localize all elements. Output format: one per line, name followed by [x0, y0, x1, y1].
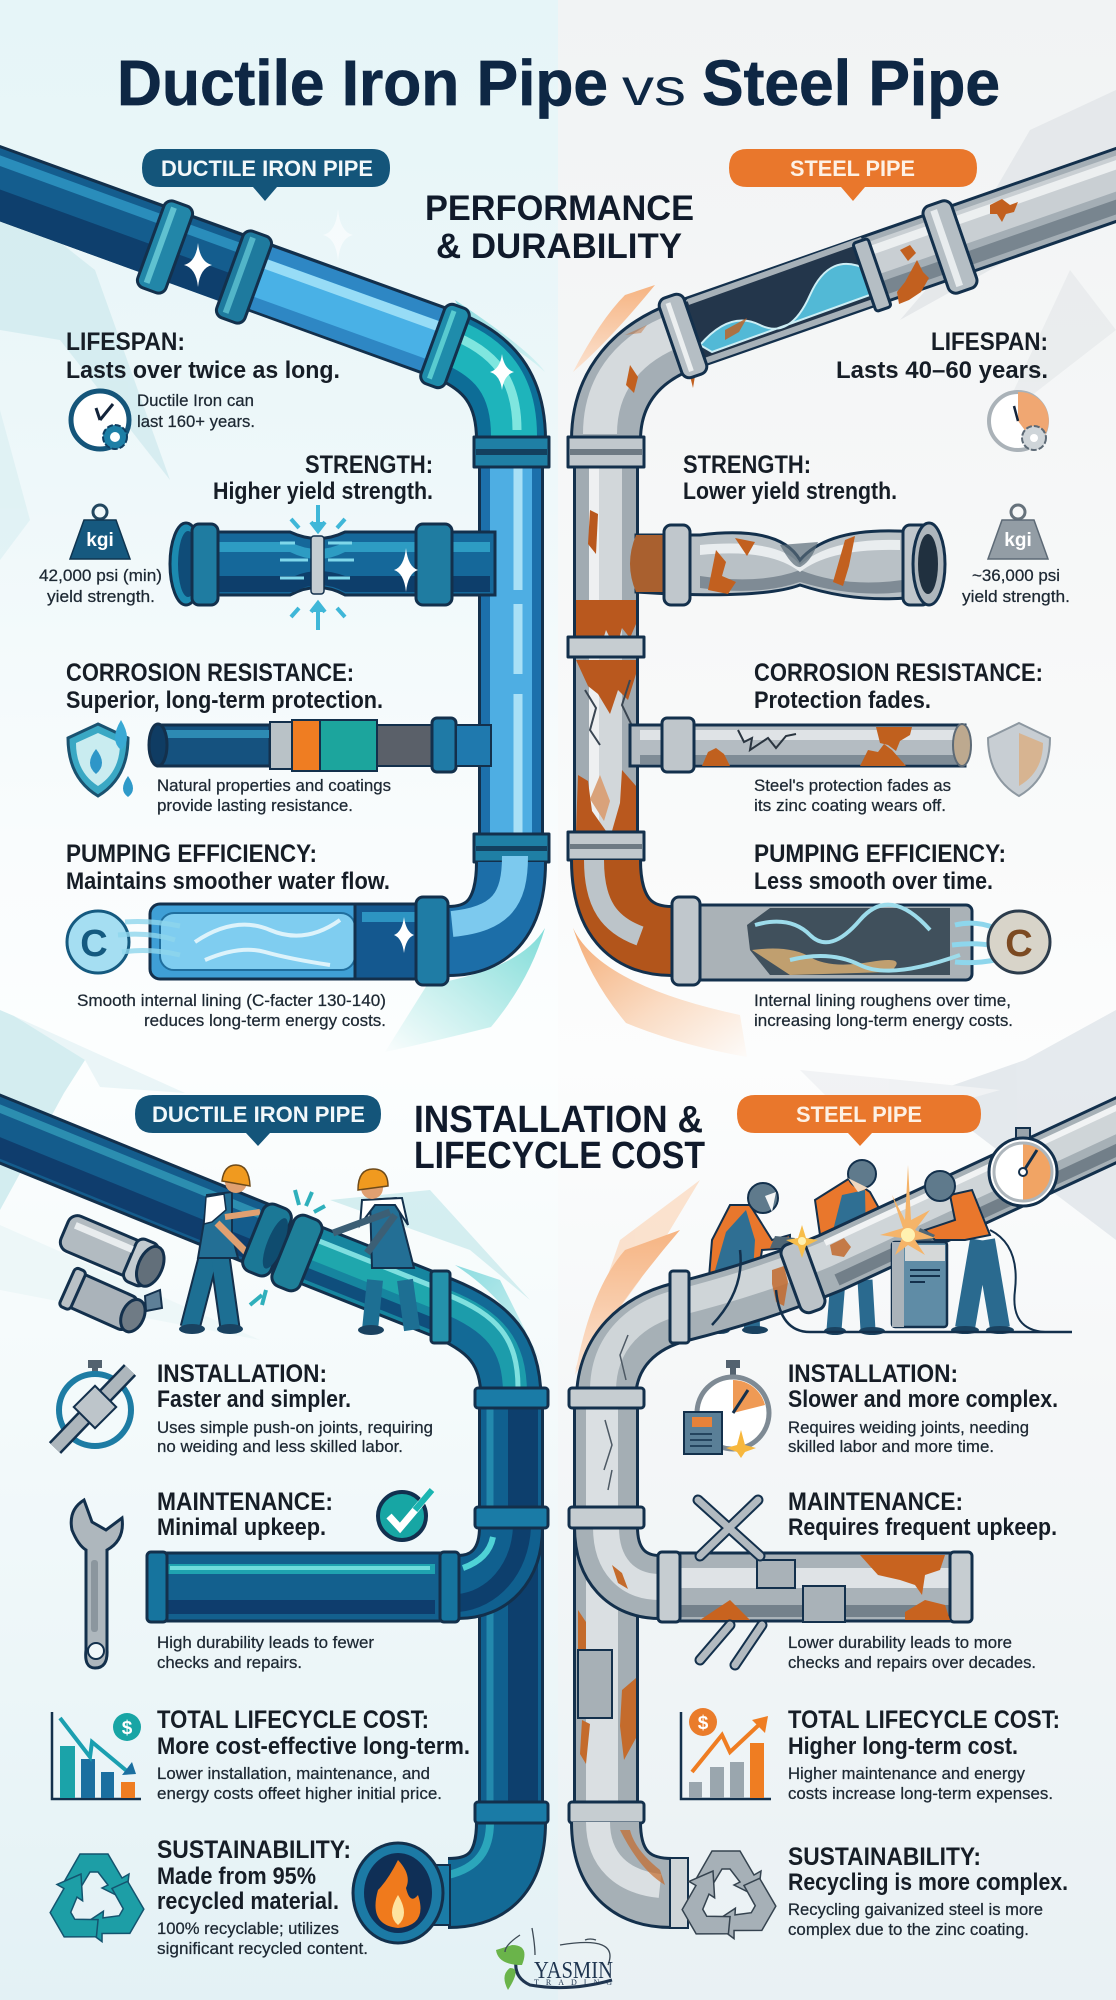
collar	[569, 1802, 644, 1823]
logo: Yasmin Trading: YASMIN	[534, 1958, 613, 1984]
elbow branch maintenance left	[147, 1507, 548, 1823]
pill: ductile iron lower: DUCTILE IRON PIPE	[152, 1102, 365, 1127]
push-on joint	[240, 1190, 325, 1305]
ductile pipe lower	[0, 1103, 548, 1830]
logo: Yasmin Trading: TRADING	[534, 1978, 612, 1987]
lifespan left: LIFESPAN:	[66, 328, 185, 356]
maintenance left text: checks and repairs.	[157, 1653, 302, 1672]
maintenance right text: Lower durability leads to more	[788, 1633, 1012, 1652]
welder right	[915, 1171, 1045, 1334]
installation left text	[157, 1360, 433, 1456]
star	[490, 354, 514, 390]
icon: C factor right	[952, 911, 1050, 973]
strength left: Higher yield strength.	[213, 478, 433, 505]
collar	[135, 199, 195, 295]
icon: stopwatch and welder right	[684, 1360, 769, 1458]
icon: C factor left	[67, 911, 180, 973]
lifespan left: Ductile Iron can	[137, 391, 254, 410]
heading: installation and lifecycle cost: LIFECYCLE COST	[414, 1135, 705, 1177]
worker arm hand	[333, 1212, 395, 1253]
icon: recycle right	[672, 1851, 784, 1949]
collar	[568, 832, 644, 860]
lifecycle right text	[788, 1706, 1060, 1803]
collar	[214, 229, 274, 325]
icon: recycle left	[40, 1854, 152, 1952]
pump pipe left	[150, 856, 515, 985]
star	[323, 209, 353, 261]
maintenance left text	[157, 1488, 374, 1672]
lifecycle left text: TOTAL LIFECYCLE COST:	[157, 1706, 429, 1734]
sustainability left text: significant recycled content.	[157, 1939, 368, 1958]
lifecycle right text: Higher maintenance and energy	[788, 1764, 1025, 1783]
sustainability left text: recycled material.	[157, 1888, 339, 1915]
sustainability left text	[157, 1836, 368, 1958]
pumping right text: Less smooth over time.	[754, 868, 993, 895]
installation left text: INSTALLATION:	[157, 1360, 327, 1388]
strength left	[213, 451, 433, 505]
arrows: compression	[291, 505, 345, 630]
pill: ductile iron	[142, 149, 390, 201]
flame joint pipe lower	[353, 1822, 511, 1943]
pill: steel lower: STEEL PIPE	[796, 1102, 922, 1127]
installation right text: skilled labor and more time.	[788, 1437, 994, 1456]
gauge	[989, 1128, 1057, 1206]
collar	[418, 302, 472, 390]
icon: shield right	[988, 723, 1050, 796]
collar	[569, 1388, 644, 1408]
strength left: STRENGTH:	[305, 451, 433, 479]
maintenance right text	[788, 1488, 1057, 1672]
icon: C factor left: C	[80, 923, 108, 965]
pill: steel lower	[737, 1095, 981, 1146]
heading: performance and durability: & DURABILITY	[436, 227, 682, 266]
icon: weight right	[988, 505, 1048, 559]
steel upper pipe	[568, 160, 1116, 860]
strength pipe left	[170, 523, 495, 605]
maintenance right text: Requires frequent upkeep.	[788, 1514, 1057, 1541]
strength value left	[39, 566, 162, 606]
sustainability left text: SUSTAINABILITY:	[157, 1836, 351, 1864]
welding machine	[892, 1242, 947, 1327]
lifespan left: Lasts over twice as long.	[66, 357, 340, 384]
lifecycle left text	[157, 1706, 470, 1803]
collar	[921, 199, 979, 295]
steel pipe lower	[569, 1101, 1116, 1830]
cutaway edges	[688, 240, 882, 362]
chart: cost falling	[52, 1712, 141, 1799]
icon: crossed wrenches	[698, 1500, 762, 1665]
corrosion left text: Natural properties and coatings	[157, 776, 391, 795]
icon: weight left: kgi	[86, 530, 114, 551]
pumping right text: PUMPING EFFICIENCY:	[754, 840, 1006, 868]
icon: clock left	[71, 391, 129, 449]
strength value right	[962, 566, 1070, 606]
lifecycle left text: Lower installation, maintenance, and	[157, 1764, 430, 1783]
installation left text: no weiding and less skilled labor.	[157, 1437, 403, 1456]
spare pipes	[56, 1209, 170, 1339]
installation right text: INSTALLATION:	[788, 1360, 958, 1388]
corrosion right text: Steel's protection fades as	[754, 776, 951, 795]
sustainability left text: Made from 95%	[157, 1863, 316, 1890]
collar	[853, 238, 891, 312]
corrosion right text	[754, 659, 1043, 815]
water in cutaway	[700, 264, 878, 352]
pumping left text: reduces long-term energy costs.	[144, 1011, 386, 1030]
corrosion pipe right	[630, 718, 971, 772]
maintenance left text: Minimal upkeep.	[157, 1514, 326, 1541]
sustainability right text: Recycling is more complex.	[788, 1869, 1068, 1896]
heading: installation and lifecycle cost: INSTALLATION &	[414, 1099, 703, 1141]
worker behind pipe	[358, 1169, 414, 1335]
decorative shards	[0, 90, 1116, 1370]
corrosion right text: its zinc coating wears off.	[754, 796, 946, 815]
rust on vertical	[576, 510, 636, 831]
strength right: STRENGTH:	[683, 451, 811, 479]
lifespan right: LIFESPAN:	[931, 328, 1048, 356]
maintenance left text: High durability leads to fewer	[157, 1633, 374, 1652]
maintenance right text: MAINTENANCE:	[788, 1488, 963, 1516]
title: vs	[622, 59, 686, 117]
corrosion pipe left	[149, 718, 491, 772]
heading: installation and lifecycle cost	[414, 1099, 705, 1177]
collar	[568, 637, 644, 657]
pumping right text	[754, 840, 1013, 1030]
pumping left text: PUMPING EFFICIENCY:	[66, 840, 317, 868]
strength right: Lower yield strength.	[683, 478, 897, 505]
pill: ductile iron: DUCTILE IRON PIPE	[161, 156, 373, 181]
corrosion left text: Superior, long-term protection.	[66, 687, 383, 714]
icon: stopwatch left	[55, 1360, 131, 1448]
lifespan right: Lasts 40–60 years.	[836, 357, 1048, 384]
strength right	[683, 451, 897, 505]
accent swooshes	[385, 285, 747, 1375]
icon: check circle	[378, 1490, 432, 1540]
pumping right text: increasing long-term energy costs.	[754, 1011, 1013, 1030]
pill: steel	[729, 149, 977, 201]
pumping left text: Maintains smoother water flow.	[66, 868, 390, 895]
icon: weight right: kgi	[1004, 530, 1032, 551]
heading: performance and durability	[425, 189, 694, 266]
strength value right: yield strength.	[962, 587, 1070, 606]
lifecycle left text: More cost-effective long-term.	[157, 1733, 470, 1760]
sustainability right text: Recycling gaivanized steel is more	[788, 1900, 1043, 1919]
collar	[568, 437, 644, 467]
welder behind pipe	[815, 1160, 885, 1335]
rust patches	[625, 199, 1018, 393]
maintenance left text: MAINTENANCE:	[157, 1488, 333, 1516]
collar	[474, 834, 549, 862]
pump pipe right	[594, 860, 972, 985]
sustainability right text	[788, 1843, 1068, 1939]
collar	[474, 437, 549, 467]
lifespan left	[66, 328, 340, 431]
pumping left text: Smooth internal lining (C-facter 130-140)	[77, 991, 386, 1010]
collar	[475, 1388, 548, 1408]
installation right text: Requires weiding joints, needing	[788, 1418, 1029, 1437]
installation right text	[788, 1360, 1058, 1456]
chart: cost rising	[681, 1708, 771, 1799]
maintenance right text: checks and repairs over decades.	[788, 1653, 1036, 1672]
corrosion left text	[66, 659, 391, 815]
steel patch	[578, 1650, 612, 1718]
sustainability right text: complex due to the zinc coating.	[788, 1920, 1029, 1939]
installation left text: Uses simple push-on joints, requiring	[157, 1418, 433, 1437]
pumping left text	[66, 840, 390, 1030]
crack	[585, 680, 634, 745]
strength value right: ~36,000 psi	[972, 566, 1060, 585]
heading: performance and durability: PERFORMANCE	[425, 189, 694, 228]
steel bottom bend	[598, 1822, 688, 1928]
hose and ground line	[712, 1250, 1072, 1332]
collar	[657, 292, 709, 380]
pill: steel: STEEL PIPE	[790, 156, 915, 181]
ductile iron upper pipe	[0, 156, 549, 862]
installation left text: Faster and simpler.	[157, 1386, 351, 1413]
strength pipe right	[630, 523, 945, 605]
lifecycle right text: costs increase long-term expenses.	[788, 1784, 1053, 1803]
chart: cost rising: $	[698, 1713, 709, 1734]
sustainability right text: SUSTAINABILITY:	[788, 1843, 981, 1871]
pill: ductile iron lower	[135, 1095, 381, 1146]
corrosion right text: CORROSION RESISTANCE:	[754, 659, 1043, 687]
title: Ductile Iron Pipe	[117, 47, 608, 119]
strength value left: yield strength.	[47, 587, 155, 606]
welder left behind pipe	[708, 1183, 795, 1334]
elbow branch maintenance right	[569, 1507, 972, 1622]
worker pushing pipe	[179, 1165, 260, 1334]
icon: wrench left	[71, 1500, 122, 1668]
star	[184, 243, 212, 287]
pumping right text: Internal lining roughens over time,	[754, 991, 1011, 1010]
icon: C factor right: C	[1005, 923, 1033, 965]
sustainability left text: 100% recyclable; utilizes	[157, 1919, 339, 1938]
lifespan left: last 160+ years.	[137, 412, 255, 431]
lifecycle right text: TOTAL LIFECYCLE COST:	[788, 1706, 1060, 1734]
lifecycle left text: energy costs offeet higher initial price.	[157, 1784, 442, 1803]
lifecycle right text: Higher long-term cost.	[788, 1733, 1018, 1760]
sparks	[786, 1165, 935, 1258]
lifespan right	[836, 328, 1048, 384]
title	[117, 47, 1000, 119]
chart: cost falling: $	[122, 1718, 133, 1739]
rust on lower vertical	[578, 1610, 636, 1764]
logo: Yasmin Trading	[496, 1928, 613, 1990]
title: Steel Pipe	[702, 47, 1000, 119]
installation right text: Slower and more complex.	[788, 1386, 1058, 1413]
corrosion left text: CORROSION RESISTANCE:	[66, 659, 354, 687]
corrosion right text: Protection fades.	[754, 687, 931, 714]
corrosion left text: provide lasting resistance.	[157, 796, 353, 815]
strength value left: 42,000 psi (min)	[39, 566, 162, 585]
icon: weight left	[70, 505, 130, 559]
icon: clock right	[989, 392, 1049, 450]
collar	[431, 1271, 450, 1343]
icon: shield and drops left	[68, 720, 133, 797]
